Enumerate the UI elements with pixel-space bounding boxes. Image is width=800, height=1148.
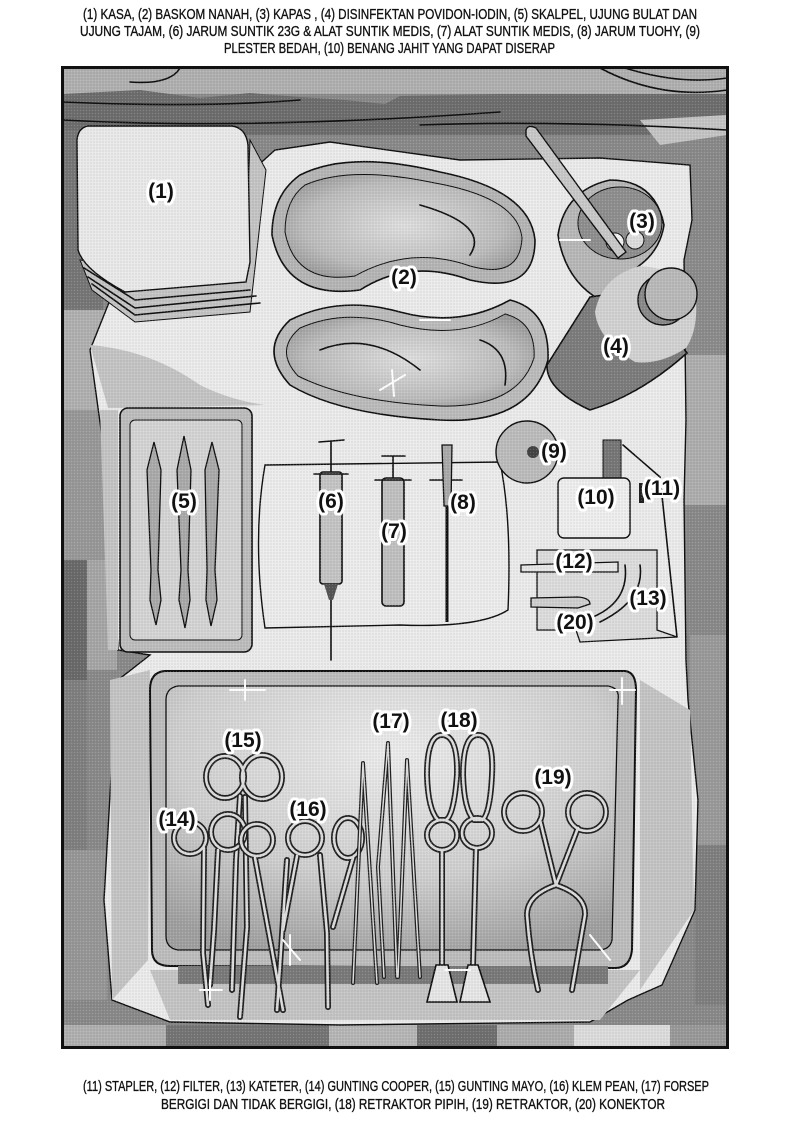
caption: bottom list of items 11 to 20: BERGIGI DAN TIDAK BERGIGI, (18) RETRAKTOR PIPIH, (19) RETRAKTOR, (20) KONEKTOR [161, 1096, 665, 1113]
number labels: (7) [381, 520, 407, 543]
caption: top list of items 1 to 10 [80, 6, 700, 57]
illustration panel: medical instruments on a draped table [62, 68, 728, 1048]
item 14: Cooper scissors [174, 814, 245, 1005]
items 12, 13, 20: catheter kit box [521, 550, 677, 642]
halftone texture [63, 68, 727, 1047]
number labels: (5) [171, 490, 197, 513]
item 1: gauze stack [77, 126, 266, 322]
number labels: (6) [318, 490, 344, 513]
number labels: (20) [556, 611, 594, 634]
number labels: (11) [644, 477, 680, 500]
item 10: suture package [558, 478, 630, 538]
wooden table background [63, 68, 727, 1047]
item 8: tuohy needle [430, 445, 462, 622]
instrument tray [150, 671, 636, 984]
number labels: (10) [577, 486, 615, 509]
item 2: kidney basins [272, 162, 548, 420]
item 6: syringe with needle [314, 440, 348, 660]
number labels: (18) [440, 709, 478, 732]
item 7: syringe [375, 456, 411, 606]
item 17: forceps [353, 743, 420, 983]
number labels: (16) [289, 798, 327, 821]
item 15: Mayo scissors [206, 755, 282, 1017]
item 4: disinfectant bottle [547, 266, 697, 410]
surgical drape cloth [90, 142, 698, 1025]
scalpels [147, 436, 219, 628]
item 19: retractor [504, 793, 606, 990]
frame border [62, 68, 728, 1048]
number labels: (8) [450, 491, 476, 514]
number labels: (1) [148, 180, 174, 203]
item 5: scalpel tray [120, 408, 252, 652]
item 18: flat retractors [427, 735, 492, 1002]
number labels: (4) [603, 335, 629, 358]
item 11: stapler [603, 440, 677, 637]
number labels: (14) [158, 808, 196, 831]
item 9: surgical tape roll [496, 421, 558, 483]
number labels: (15) [224, 729, 262, 752]
item 16: Pean clamps [241, 818, 362, 1010]
number labels: (3) [629, 210, 655, 233]
caption: top list of items 1 to 10: PLESTER BEDAH, (10) BENANG JAHIT YANG DAPAT DISERAP [224, 40, 555, 57]
caption: bottom list of items 11 to 20 [83, 1078, 709, 1113]
number labels: (17) [372, 710, 410, 733]
number labels: (9) [541, 440, 567, 463]
number labels: (2) [391, 266, 417, 289]
number labels: (19) [534, 766, 572, 789]
sparkles [200, 240, 635, 1000]
number labels: (13) [629, 587, 667, 610]
item 3: cotton jar with forceps [526, 126, 664, 300]
towel with syringes [258, 440, 509, 660]
number labels [148, 180, 680, 831]
number labels: (12) [555, 550, 593, 573]
cloth shading [90, 345, 694, 1020]
